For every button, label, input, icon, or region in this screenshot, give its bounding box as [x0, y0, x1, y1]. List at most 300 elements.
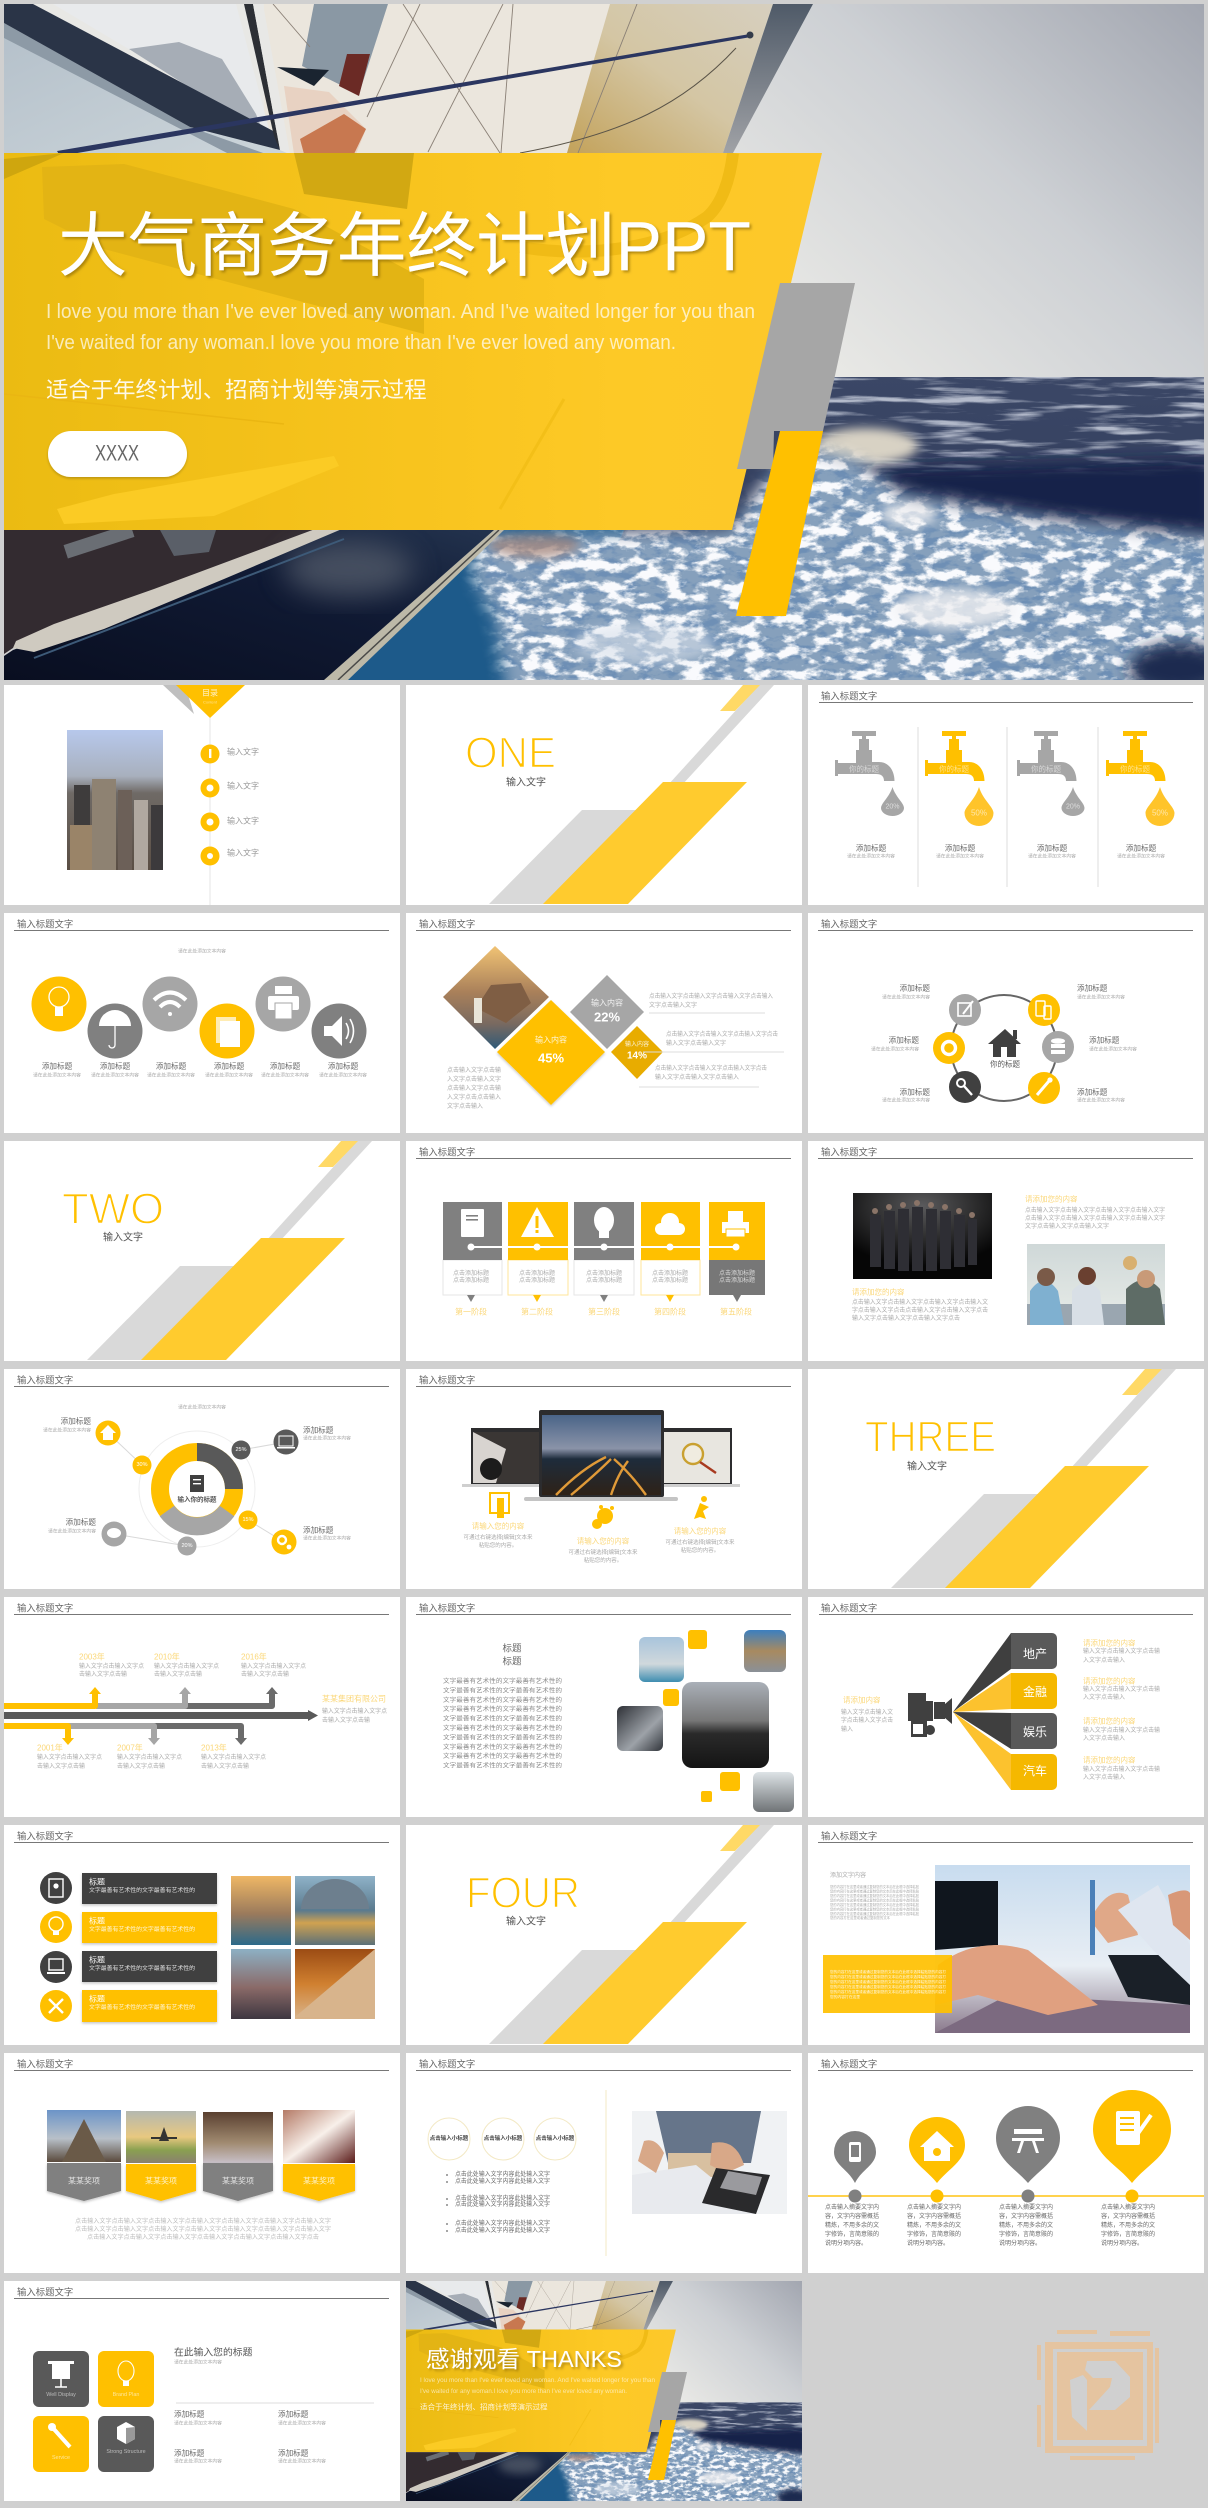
english text block: I love you more than I've ever loved any woman. And I've waited longer for you than: [420, 2378, 655, 2384]
section title: TWO: [62, 1184, 164, 1234]
pin text 3: 精炼，不用多余的文: [999, 2221, 1053, 2229]
grey diamond 22%: [570, 975, 644, 1049]
yellow band: [406, 2329, 677, 2452]
hub labels: 添加标题: [1077, 1086, 1108, 1096]
tile: Service: Service: [52, 2455, 70, 2461]
list row 3: [40, 1951, 217, 1983]
faucet 4: [1106, 731, 1174, 826]
panel: five stage cards: [406, 1141, 802, 1361]
category blocks: 地产: [1023, 1647, 1047, 1661]
yellow squares: [663, 1630, 740, 1802]
icon: wifi: [142, 976, 198, 1032]
hub labels: 请在此处添加文本内容: [1089, 1046, 1137, 1052]
art text paragraph: 文字最善有艺术性的文字最善有艺术性的: [443, 1733, 562, 1741]
stage card 2: 点击添加标题: [519, 1276, 555, 1284]
panel: handshake document: [808, 1825, 1204, 2045]
left description: 输入: [841, 1725, 853, 1733]
pin text 1: 容，文字内容需概括: [825, 2212, 879, 2220]
bullet list: 点击此处输入文字内容此处输入文字: [455, 2200, 550, 2208]
panel: circles and calculator: [406, 2053, 802, 2273]
slide header: 输入标题文字: [17, 1830, 73, 1842]
stage labels: [455, 1306, 752, 1316]
pin text 4: 容，文字内容需概括: [1101, 2212, 1155, 2220]
top note: 请在此处添加文本内容: [178, 1404, 226, 1410]
text block bottom left: 点击输入文字点击输入文字点击输入文字点击输入文: [852, 1298, 988, 1306]
rays: [953, 1633, 1011, 1790]
company label: 击输入文字点击输: [322, 1716, 370, 1724]
panel: section FOUR: [406, 1825, 802, 2045]
contents items: 输入文字: [227, 816, 259, 826]
donut labels: 请在此处添加文本内容: [43, 1426, 91, 1434]
outer thin ring: [139, 1431, 255, 1547]
year labels upper: 击输入文字点击输: [154, 1670, 202, 1678]
photo grid: [231, 1876, 375, 2019]
pin text 1: 点击输入摘要文字内: [825, 2203, 879, 2211]
text block bottom left: [852, 1286, 988, 1322]
panel: four photo cards: [4, 2053, 400, 2273]
contents items: 输入文字: [227, 848, 259, 858]
year labels lower: 输入文字点击输入文字点: [37, 1753, 102, 1761]
tile: Well Display: Well Display: [46, 2392, 76, 2398]
art text paragraph: 文字最善有艺术性的文字最善有艺术性的: [443, 1743, 562, 1751]
top note: 请在此处添加文本内容: [178, 948, 226, 954]
section subtitle: 输入文字: [103, 1230, 143, 1244]
english text block: I love you more than I've ever loved any woman. And I've waited longer for you than: [46, 301, 755, 323]
diagonal shapes: [489, 1825, 774, 2044]
photo diamond: [443, 946, 549, 1049]
feature text center: 可通过右键选择[编辑]文本来: [568, 1548, 638, 1556]
feature labels: 请在此处添加文本内容: [174, 2458, 222, 2464]
faucet labels: [847, 842, 1165, 860]
icon: speaker: [312, 1004, 366, 1058]
pin text 2: [907, 2203, 961, 2247]
contents items: 输入文字: [227, 780, 259, 790]
panel: laptops: [406, 1369, 802, 1589]
yellow text box: 您的内容打在这里或者通过复制您的文本后在此框中选择粘贴您的内容打: [830, 1979, 946, 1984]
text: paragraph: 您的内容打在这里或者通过复制您的文本后在此框中选择粘贴: [830, 1893, 919, 1898]
english text block: I've waited for any woman.I love you more than I've ever loved any woman.: [46, 332, 676, 354]
icon: home: [96, 1420, 120, 1446]
small diamond 14%: [611, 1026, 663, 1079]
stage card 2: 点击添加标题: [519, 1269, 555, 1277]
icon: laptop: [274, 1430, 298, 1454]
panel: section ONE: [406, 685, 802, 905]
slide header: 输入标题文字: [821, 1146, 877, 1158]
circle labels: 添加标题: [214, 1060, 245, 1070]
bullet list: 点击此处输入文字内容此处输入文字: [455, 2177, 550, 2185]
stage card 4: 点击添加标题: [652, 1269, 688, 1277]
bullet list: 点击此处输入文字内容此处输入文字: [455, 2170, 550, 2178]
left text block: 入文字点击输入文字: [447, 1075, 501, 1083]
percent bubbles: 15%: [242, 1517, 254, 1523]
hub labels: 添加标题: [900, 982, 930, 992]
list row 4: 标题: [89, 1994, 105, 2004]
heading: [502, 1642, 522, 1668]
bullet list: 点击此处输入文字内容此处输入文字: [455, 2226, 550, 2234]
main title: 大气商务年终计划PPT: [58, 207, 751, 285]
circle labels: 点击输入小标题: [484, 2134, 523, 2142]
category descriptions: 请添加您的内容: [1083, 1754, 1136, 1764]
small diamond 14%: 输入内容: [625, 1040, 649, 1048]
tile: Brand Plan: [98, 2351, 154, 2407]
feature labels: 添加标题: [174, 2448, 205, 2458]
faucet 3: 20%: [1066, 804, 1080, 810]
circle labels: 添加标题: [270, 1060, 301, 1070]
contents timeline line: [209, 718, 211, 905]
circle labels: 点击输入小标题: [430, 2134, 469, 2142]
city photo: [67, 730, 163, 870]
panel: timeline arrows: [4, 1597, 400, 1817]
year labels upper: 输入文字点击输入文字点: [241, 1662, 306, 1670]
category descriptions: 入文字点击输入: [1083, 1773, 1125, 1781]
description paragraph: 点击输入文字点击输入文字点击输入文字点击输入文字点击输入文字点击输入文字点击输入文字: [75, 2225, 331, 2233]
feature labels: [174, 2408, 326, 2464]
panel: thanks slide: [406, 2281, 810, 2506]
ring: [951, 995, 1057, 1101]
faucet labels: 添加标题: [945, 842, 976, 852]
slide header: 输入标题文字: [419, 1146, 475, 1158]
pin text 3: 说明分项内容。: [999, 2239, 1041, 2247]
panel: cover slide: [4, 4, 1208, 695]
hub labels: 请在此处添加文本内容: [882, 1096, 930, 1104]
lower arrows: [4, 1723, 247, 1745]
pin text 4: 精炼，不用多余的文: [1101, 2221, 1155, 2229]
percent bubbles: 30%: [136, 1462, 148, 1468]
panel: contents slide: [4, 685, 400, 905]
slide header: 输入标题文字: [17, 1602, 73, 1614]
text: paragraph: 您的内容打在这里或者通过复制您的文本后在此框中选择粘贴: [830, 1906, 919, 1912]
right text block 2: 点击输入文字点击输入文字点击输入文字点击: [666, 1030, 778, 1038]
percent bubbles: [132, 1440, 258, 1556]
year labels lower: 2001年: [37, 1742, 63, 1752]
year labels lower: 2007年: [117, 1742, 143, 1752]
right text block 3: [639, 1064, 767, 1087]
slide header: 输入标题文字: [419, 918, 475, 930]
circle labels: 添加标题: [100, 1060, 131, 1070]
slide header: 输入标题文字: [821, 690, 877, 702]
section subtitle: 输入文字: [506, 1914, 546, 1928]
icon: gears: [272, 1530, 296, 1554]
feature text right: 粘贴您的内容。: [681, 1546, 719, 1554]
donut labels: 添加标题: [61, 1416, 91, 1426]
photo: meeting: [1027, 1244, 1165, 1325]
text: paragraph: 您的内容打在这里或者通过复制您的文本后在此框中选择粘贴: [830, 1884, 919, 1889]
feature text right: 可通过右键选择[编辑]文本来: [665, 1538, 735, 1546]
english text block: [46, 301, 755, 354]
hub labels: 请在此处添加文本内容: [1077, 1096, 1125, 1104]
thanks title: 感谢观看 THANKS: [426, 2346, 622, 2372]
faucet 2: [925, 731, 994, 826]
percent bubbles: 25%: [235, 1447, 247, 1453]
donut center label: 输入你的标题: [178, 1494, 217, 1504]
circle labels: [430, 2134, 575, 2142]
list row 2: 标题: [89, 1916, 105, 1926]
text: paragraph: 添加文字内容: [830, 1871, 866, 1879]
section subtitle: 输入文字: [907, 1460, 947, 1472]
list row 4: 文字最善有艺术性的文字最善有艺术性的: [89, 2003, 195, 2011]
left description: 输入文字点击输入文: [841, 1708, 893, 1716]
section title: FOUR: [466, 1868, 580, 1918]
feature labels: 请在此处添加文本内容: [278, 2420, 326, 2426]
left description: 请添加内容: [843, 1694, 881, 1704]
faucet 4: 你的标题: [1120, 764, 1150, 774]
cover photo: sailboat at sea: [4, 4, 1208, 695]
art text paragraph: 文字最善有艺术性的文字最善有艺术性的: [443, 1752, 562, 1760]
pin text 4: [1101, 2203, 1155, 2247]
description paragraph: 点击输入文字点击输入文字点击输入文字点击输入文字点击输入文字点击输入文字点击输入文字: [75, 2217, 331, 2225]
icon: touch: [490, 1493, 509, 1518]
contents header triangles: 目录: [202, 688, 218, 698]
faucet 2: 50%: [971, 808, 987, 818]
donut labels: 添加标题: [303, 1424, 334, 1434]
faucet labels: 请在此处添加文本内容: [1117, 852, 1165, 860]
feature text right: 请输入您的内容: [674, 1526, 727, 1536]
stage card 3: 点击添加标题: [586, 1276, 622, 1284]
yellow text box: 您的内容打在这里或者通过复制您的文本后在此框中选择粘贴您的内容打: [830, 1984, 946, 1989]
text block bottom left: 字点击输入文字点击点击输入文字点击输入文字点击: [852, 1306, 988, 1314]
card 2: [126, 2111, 196, 2201]
circle labels: [33, 1060, 367, 1078]
year labels lower: [37, 1742, 266, 1770]
left text block: [447, 1066, 501, 1110]
card 4: 某某奖项: [303, 2176, 335, 2186]
pin text 3: 点击输入摘要文字内: [999, 2203, 1053, 2211]
description paragraph: 点击输入文字点击输入文字点击输入文字点击输入文字点击输入文字点击输入文字点击: [87, 2233, 319, 2241]
bullet list: [446, 2170, 550, 2234]
donut labels: [43, 1416, 351, 1542]
icon: runner: [694, 1496, 709, 1519]
grey diamond 22%: 输入内容: [591, 998, 623, 1008]
pin text 1: [825, 2203, 879, 2247]
stage card 1: 点击添加标题: [453, 1269, 489, 1277]
stage card 3: 点击添加标题: [586, 1269, 622, 1277]
photo: business team: [853, 1193, 992, 1279]
year labels lower: 击输入文字点击输: [117, 1762, 165, 1770]
icon: coins: [592, 1505, 614, 1529]
contents header triangles: Content: [203, 700, 218, 704]
watermark stamp: [1037, 2330, 1159, 2460]
hub icons: [933, 994, 1074, 1104]
category blocks: 金融: [1023, 1684, 1047, 1699]
stage labels: 第五阶段: [720, 1306, 752, 1316]
yellow diamond 45%: [497, 1000, 605, 1105]
diagonal shapes: [489, 685, 774, 904]
card 4: [283, 2110, 355, 2201]
english text block: I've waited for any woman.I love you more than I've ever loved any woman.: [420, 2389, 627, 2395]
stage card 5: [709, 1202, 765, 1302]
tile: Strong Structure: [98, 2416, 154, 2472]
faucet 3: [1017, 731, 1084, 816]
card 2: 某某奖项: [145, 2176, 177, 2186]
stage labels: 第三阶段: [588, 1306, 620, 1316]
yellow text box: 您的内容打在这里或者通过复制您的文本后在此框中选择粘贴您的内容打: [830, 1989, 946, 1994]
year labels upper: 击输入文字点击输: [79, 1670, 127, 1678]
category descriptions: [1083, 1638, 1160, 1781]
feature text left: [463, 1520, 533, 1549]
faucet labels: 添加标题: [1037, 842, 1068, 852]
list row 2: [40, 1911, 217, 1943]
pin text 2: 容，文字内容需概括: [907, 2212, 961, 2220]
feature text center: 请输入您的内容: [577, 1536, 630, 1546]
list row 4: [40, 1990, 217, 2022]
dividers: [918, 727, 1098, 887]
faucet 4: 50%: [1152, 808, 1168, 818]
text: paragraph: 您的内容打在这里或者通过复制您的文本后在此框中选择粘贴: [830, 1911, 919, 1916]
panel: faucets: [808, 685, 1204, 905]
heading: 标题: [502, 1642, 522, 1654]
feature text left: 粘贴您的内容。: [479, 1541, 517, 1549]
panel: camera projection: [808, 1597, 1204, 1817]
pin text 4: 字修饰，言简意赅的: [1101, 2230, 1155, 2238]
contents items: 输入文字: [227, 746, 259, 756]
stage labels: 第一阶段: [455, 1306, 487, 1316]
right laptop: [662, 1428, 740, 1487]
year labels upper: 2016年: [241, 1652, 267, 1662]
right text block 2: 输入文字点击输入文字: [666, 1039, 726, 1047]
slide header: 输入标题文字: [17, 2286, 73, 2298]
center laptop: [524, 1410, 678, 1501]
photo: hands and document: [935, 1865, 1190, 2033]
faucet 1: [835, 731, 904, 816]
list row 1: 文字最善有艺术性的文字最善有艺术性的: [89, 1886, 195, 1894]
feature labels: 请在此处添加文本内容: [278, 2458, 326, 2464]
year labels upper: [79, 1652, 306, 1678]
text: paragraph: 您的内容打在这里或者通过复制您的文本后在此框中选择粘贴: [830, 1898, 919, 1902]
text: paragraph: 您的内容打在这里或者通过复制您的文本: [830, 1915, 890, 1920]
circle labels: 请在此处添加文本内容: [261, 1072, 309, 1078]
right text block 1: 点击输入文字点击输入文字点击输入文字点击输入: [649, 992, 773, 1000]
diagonal shapes: [891, 1369, 1176, 1588]
panel: six icon circles: [4, 913, 400, 1133]
card 1: 某某奖项: [68, 2176, 100, 2186]
left text block: 文字点击输入: [447, 1102, 483, 1110]
category descriptions: 入文字点击输入: [1083, 1693, 1125, 1701]
feature text center: [568, 1536, 638, 1564]
hub labels: 请在此处添加文本内容: [1077, 994, 1125, 1000]
category descriptions: 输入文字点击输入文字点击输: [1083, 1647, 1160, 1655]
hub labels: 请在此处添加文本内容: [882, 994, 930, 1000]
outline circles: [428, 2118, 576, 2160]
right text block 3: 输入文字点击输入文字点击输入: [655, 1073, 739, 1081]
icon: house: [988, 1029, 1021, 1057]
panel: section THREE: [808, 1369, 1204, 1589]
pin text 3: [999, 2203, 1053, 2247]
donut labels: 请在此处添加文本内容: [48, 1528, 96, 1534]
circle labels: 请在此处添加文本内容: [147, 1072, 195, 1078]
art text paragraph: 文字最善有艺术性的文字最善有艺术性的: [443, 1686, 562, 1694]
year labels lower: 击输入文字点击输: [201, 1762, 249, 1770]
faucet labels: 请在此处添加文本内容: [847, 852, 895, 860]
category descriptions: 输入文字点击输入文字点击输: [1083, 1765, 1160, 1773]
slide header: 输入标题文字: [419, 1374, 475, 1386]
text: paragraph: [830, 1871, 919, 1920]
hub center label: 你的标题: [990, 1058, 1020, 1068]
slide header: 输入标题文字: [419, 1602, 475, 1614]
category descriptions: 输入文字点击输入文字点击输: [1083, 1685, 1160, 1693]
panel: hub circle: [808, 913, 1204, 1133]
category descriptions: 输入文字点击输入文字点击输: [1083, 1726, 1160, 1734]
pin 2: [909, 2117, 965, 2202]
feature labels: 添加标题: [174, 2408, 205, 2418]
tile: Well Display: [33, 2351, 89, 2407]
pin 3: [996, 2106, 1060, 2202]
faucet labels: 请在此处添加文本内容: [936, 852, 984, 860]
left text block: 点击输入文字点击输: [447, 1066, 501, 1074]
panel: four feature tiles: [4, 2281, 400, 2501]
right text block 1: 文字点击输入文字: [649, 1001, 697, 1009]
main dark arrow: [4, 1710, 318, 1721]
stage labels: 第四阶段: [654, 1306, 686, 1316]
card 3: [203, 2112, 273, 2201]
year labels lower: 输入文字点击输入文字点: [201, 1753, 266, 1761]
pin 1: [834, 2131, 876, 2202]
category descriptions: 请添加您的内容: [1083, 1716, 1136, 1726]
stage card 4: 点击添加标题: [652, 1276, 688, 1284]
yellow diamond 45%: 45%: [538, 1050, 564, 1066]
pin text 1: 说明分项内容。: [825, 2239, 867, 2247]
card 1: [47, 2110, 121, 2201]
slide header: 输入标题文字: [821, 2058, 877, 2070]
stage card 1: 点击添加标题: [453, 1276, 489, 1284]
yellow text box: 您的内容打在这里: [830, 1994, 860, 1999]
category descriptions: 请添加您的内容: [1083, 1638, 1136, 1648]
art text paragraph: 文字最善有艺术性的文字最善有艺术性的: [443, 1677, 562, 1685]
text block top right: 文字点击输入文字点击输入文字: [1025, 1222, 1109, 1230]
circle labels: 请在此处添加文本内容: [91, 1072, 139, 1078]
stage card 2: [508, 1202, 568, 1302]
panel: list with photos: [4, 1825, 400, 2045]
subtitle: 适合于年终计划、招商计划等演示过程: [420, 2402, 548, 2412]
slide header: 输入标题文字: [17, 2058, 73, 2070]
hub labels: 添加标题: [889, 1034, 919, 1044]
left laptop: [462, 1428, 541, 1487]
category descriptions: 入文字点击输入: [1083, 1734, 1125, 1742]
contents header triangles: [163, 685, 245, 718]
hub labels: 请在此处添加文本内容: [871, 1046, 919, 1052]
pin text 1: 精炼，不用多余的文: [825, 2221, 879, 2229]
slide header: 输入标题文字: [17, 918, 73, 930]
connector lines: [108, 1433, 286, 1546]
heading: [174, 2346, 253, 2366]
category blocks: [1011, 1633, 1057, 1790]
white pill button: [48, 431, 187, 477]
pin text 3: 字修饰，言简意赅的: [999, 2230, 1053, 2238]
category descriptions: 入文字点击输入: [1083, 1656, 1125, 1664]
icon: bulb: [32, 976, 86, 1032]
contents items: [200, 744, 259, 866]
slide header: 输入标题文字: [419, 2058, 475, 2070]
category blocks: 娱乐: [1023, 1725, 1047, 1739]
icon: printer: [256, 976, 310, 1032]
pin text 4: 点击输入摘要文字内: [1101, 2203, 1155, 2211]
list row 3: 文字最善有艺术性的文字最善有艺术性的: [89, 1964, 195, 1972]
hub labels: 添加标题: [1077, 982, 1108, 992]
company label: 输入文字点击输入文字点: [322, 1707, 387, 1715]
donut labels: 添加标题: [303, 1524, 334, 1534]
year labels lower: 击输入文字点击输: [37, 1762, 85, 1770]
slide header: 输入标题文字: [821, 918, 877, 930]
stage card 5: 点击添加标题: [719, 1269, 755, 1277]
yellow text box: 您的内容打在这里或者通过复制您的文本后在此框中选择粘贴您的内容打: [830, 1969, 946, 1974]
feature labels: 添加标题: [278, 2408, 309, 2418]
feature labels: 添加标题: [278, 2448, 309, 2458]
right text block 1: [649, 992, 773, 1013]
company label: 某某集团有限公司: [322, 1694, 386, 1704]
faucet 3: 你的标题: [1031, 764, 1061, 774]
faucet 1: 你的标题: [849, 764, 879, 774]
section title: ONE: [465, 728, 556, 778]
icon: pages: [200, 1004, 254, 1058]
